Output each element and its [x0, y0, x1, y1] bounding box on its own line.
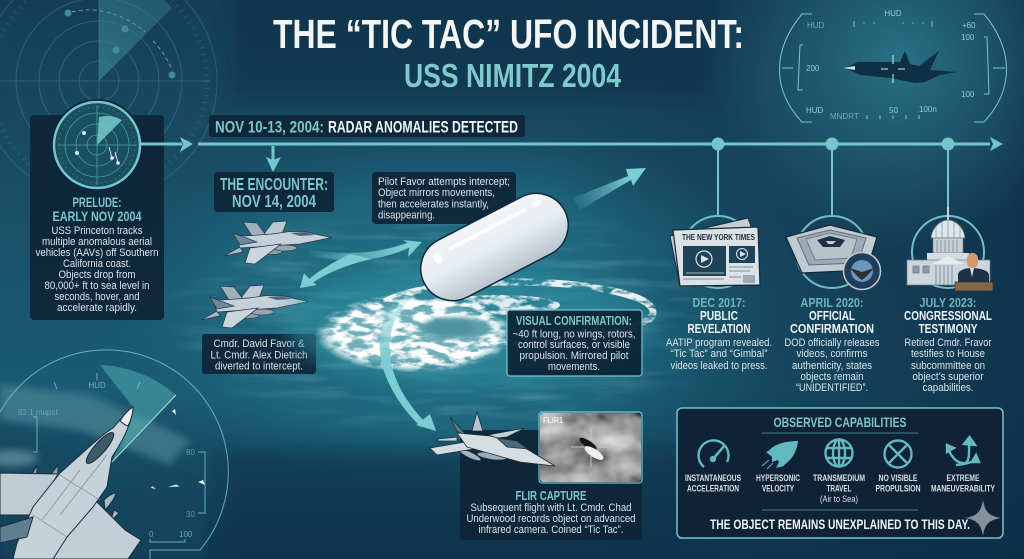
top-right HUD with silhouette jet: [780, 9, 1006, 122]
tic tac object: [410, 182, 579, 312]
event: Dec 2017 public revelation: “Tic Tac” and “Gimbal”: [670, 348, 768, 360]
panel: FLIR capture: [460, 412, 642, 540]
icon: globe: [826, 440, 852, 467]
two-way swoosh arrow: [300, 240, 422, 288]
callout: pilots: Cmdr. David Favor &: [214, 338, 305, 350]
top-right HUD with silhouette jet: 100: [961, 90, 975, 99]
panel: observed capabilities: VELOCITY: [762, 484, 794, 494]
radar anomalies date label: [209, 115, 525, 137]
panel: observed capabilities: EXTREME: [946, 473, 980, 483]
bottom-left HUD scene with clouds and fighter jet: 100: [179, 530, 193, 539]
event: July 2023 congressional testimony: CONGRESSIONAL: [904, 308, 992, 323]
event: April 2020 official confirmation: CONFIRMATION: [790, 321, 874, 336]
ocean vortex: [285, 263, 655, 387]
event: April 2020 official confirmation: [784, 216, 880, 394]
FLIR image: FLIR1: [543, 416, 563, 425]
the encounter heading: NOV 14, 2004: [232, 191, 316, 211]
panel: prelude: [30, 99, 164, 320]
icon: radar scope: [51, 99, 143, 191]
panel: observed capabilities: (Air to Sea): [820, 494, 858, 504]
panel: observed capabilities: HYPERSONIC: [756, 473, 800, 483]
top-left radar pattern: [0, 0, 217, 199]
bottom-left HUD scene with clouds and fighter jet: [0, 350, 228, 559]
bottom-left HUD scene with clouds and fighter jet: HUD: [88, 381, 106, 390]
callout: pilot attempts intercept: [372, 172, 516, 224]
icon: rocket: [762, 441, 798, 469]
event: July 2023 congressional testimony: Retired Cmdr. Fravor: [904, 337, 992, 349]
event: April 2020 official confirmation: APRIL 2020:: [800, 295, 864, 310]
callout: visual confirmation: movements.: [548, 361, 600, 373]
event: April 2020 official confirmation: DOD officially releases: [784, 337, 880, 349]
panel: prelude: USS Princeton tracks: [52, 225, 143, 237]
event: Dec 2017 public revelation: videos leaked to press.: [670, 360, 768, 372]
callout: visual confirmation: control surfaces, or visible: [518, 339, 630, 351]
event: Dec 2017 public revelation: REVELATION: [688, 321, 750, 336]
event: July 2023 congressional testimony: testifies to House: [911, 348, 985, 360]
top-right HUD with silhouette jet: 200: [806, 64, 820, 73]
bottom-left HUD scene with clouds and fighter jet: 0: [149, 530, 154, 539]
panel: FLIR capture: FLIR CAPTURE: [516, 489, 586, 503]
event: April 2020 official confirmation: videos, confirms: [796, 348, 868, 360]
callout: visual confirmation: VISUAL CONFIRMATION:: [516, 314, 632, 328]
top-right HUD with silhouette jet: HUD: [807, 21, 825, 30]
panel: observed capabilities: ACCELERATION: [687, 484, 739, 494]
top-right HUD with silhouette jet: HUD: [884, 9, 902, 18]
panel: prelude: Objects drop from: [58, 269, 136, 281]
radar anomalies date label: NOV 10-13, 2004:: [215, 118, 324, 136]
panel: observed capabilities: MANEUVERABILITY: [931, 484, 995, 494]
departure arrow: [573, 168, 646, 210]
event: Dec 2017 public revelation: AATIP program revealed.: [666, 337, 772, 349]
event: April 2020 official confirmation: objects remain: [800, 371, 864, 383]
curved arrow to FLIR jet: [380, 296, 436, 431]
icon: maneuver arrows: [947, 437, 979, 465]
panel: prelude: PRELUDE:: [72, 194, 122, 210]
panel: observed capabilities: [677, 408, 1003, 538]
title: THE “TIC TAC” UFO INCIDENT:: [273, 11, 744, 57]
bottom-left HUD scene with clouds and fighter jet: 82.1 mupst: [18, 408, 58, 417]
top-right HUD with silhouette jet: 50: [889, 106, 898, 115]
the encounter heading: [214, 172, 334, 212]
icon: Pentagon with seal: [786, 216, 880, 290]
panel: FLIR capture: Subsequent flight with Lt. Cmdr. Chad: [470, 502, 632, 514]
event: July 2023 congressional testimony: subcommittee on: [911, 360, 985, 372]
panel: prelude: multiple anomalous aerial: [42, 236, 152, 248]
the encounter heading: THE ENCOUNTER:: [220, 174, 328, 194]
event: July 2023 congressional testimony: [904, 207, 993, 394]
panel: prelude: California coast.: [63, 258, 131, 270]
icon: no propulsion: [884, 440, 912, 468]
timeline arrow: [140, 137, 1003, 216]
panel: prelude: seconds, hover, and: [54, 291, 140, 303]
callout: visual confirmation: [507, 310, 642, 376]
callout: visual confirmation: ~40 ft long, no wings, rotors,: [512, 328, 636, 340]
event: April 2020 official confirmation: “UNIDENTIFIED”.: [796, 382, 868, 394]
callout: pilot attempts intercept: Object mirrors movements,: [378, 187, 495, 199]
callout: pilot attempts intercept: Pilot Favor attempts intercept;: [378, 176, 510, 188]
icon: gauge: [699, 440, 729, 467]
event: Dec 2017 public revelation: PUBLIC: [700, 308, 738, 323]
panel: prelude: vehicles (AAVs) off Southern: [36, 247, 158, 259]
event: July 2023 congressional testimony: JULY 2023:: [920, 295, 976, 310]
radar anomalies date label: RADAR ANOMALIES DETECTED: [328, 118, 518, 136]
fighter jet 2: [201, 285, 308, 328]
icon: Capitol with witness: [907, 207, 993, 291]
sparkle watermark: [965, 500, 1001, 536]
event: July 2023 congressional testimony: TESTIMONY: [918, 321, 978, 336]
top-right HUD with silhouette jet: 100n: [919, 105, 937, 114]
event: Dec 2017 public revelation: [666, 216, 772, 372]
panel: prelude: 80,000+ ft to sea level in: [44, 280, 150, 292]
callout: pilot attempts intercept: disappearing.: [378, 210, 435, 222]
title: USS NIMITZ 2004: [404, 57, 622, 94]
FLIR image: [539, 412, 642, 483]
panel: observed capabilities: OBSERVED CAPABILITIES: [774, 414, 906, 430]
callout: visual confirmation: propulsion. Mirrored pilot: [520, 350, 628, 362]
title: [273, 11, 744, 94]
icon: newspaper: [670, 216, 760, 288]
fighter jet: large foreground: [0, 407, 141, 559]
top-right HUD with silhouette jet: 100: [961, 33, 975, 42]
callout: pilots: Lt. Cmdr. Alex Dietrich: [210, 350, 308, 362]
bottom-left HUD scene with clouds and fighter jet: 80: [186, 448, 195, 457]
icon: newspaper: THE NEW YORK TIMES: [682, 233, 756, 242]
panel: observed capabilities: TRAVEL: [826, 484, 852, 494]
callout: pilots: [202, 334, 316, 374]
event: April 2020 official confirmation: OFFICIAL: [809, 308, 855, 323]
event: July 2023 congressional testimony: object’s superior: [912, 371, 984, 383]
fighter jet 1: [224, 221, 332, 264]
panel: FLIR capture: Underwood records object on advanced: [466, 513, 636, 525]
panel: observed capabilities: NO VISIBLE: [878, 473, 918, 483]
top-right HUD with silhouette jet: +60: [962, 21, 976, 30]
event: July 2023 congressional testimony: capabilities.: [922, 382, 974, 394]
callout: pilot attempts intercept: then accelerates instantly,: [378, 198, 489, 210]
event: Dec 2017 public revelation: DEC 2017:: [692, 295, 746, 310]
top-right HUD with silhouette jet: HUD: [806, 106, 824, 115]
panel: FLIR capture: infrared camera. Coined “Tic Tac”.: [478, 524, 624, 536]
panel: observed capabilities: PROPULSION: [876, 484, 920, 494]
panel: observed capabilities: TRANSMEDIUM: [813, 473, 865, 483]
bottom-left HUD scene with clouds and fighter jet: 30: [186, 510, 195, 519]
top-right HUD with silhouette jet: MNDRT: [830, 112, 859, 121]
callout: pilots: diverted to intercept.: [215, 360, 303, 372]
panel: observed capabilities: INSTANTANEOUS: [685, 473, 741, 483]
fighter jet 3: [430, 412, 555, 466]
panel: prelude: accelerate rapidly.: [57, 302, 137, 314]
panel: prelude: EARLY NOV 2004: [52, 208, 142, 224]
event: April 2020 official confirmation: authenticity, states: [792, 360, 872, 372]
